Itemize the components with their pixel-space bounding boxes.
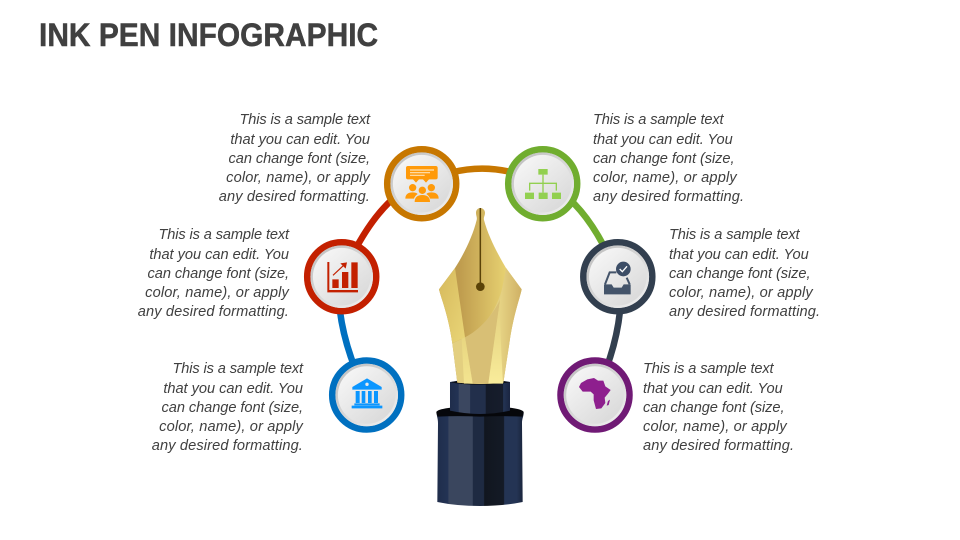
text block: top left: This is a sample text xyxy=(240,112,370,128)
text block: middle right: that you can edit. You xyxy=(669,247,809,263)
icon: rising bar chart xyxy=(327,262,358,292)
text block: bottom left: can change font (size, xyxy=(162,400,303,416)
ring xyxy=(583,242,652,311)
pen nib xyxy=(439,208,522,384)
text block: middle left xyxy=(138,227,290,320)
connector: blue xyxy=(339,277,367,395)
nib body xyxy=(439,208,522,384)
disc xyxy=(564,364,626,426)
node: navy xyxy=(583,242,652,311)
disc xyxy=(335,364,398,426)
text block: top left: can change font (size, xyxy=(229,151,370,167)
text block: bottom right: This is a sample text xyxy=(643,361,774,377)
text block: bottom right: any desired formatting. xyxy=(643,438,794,454)
icon: organisation chart xyxy=(525,169,561,199)
text block: bottom right: that you can edit. You xyxy=(643,381,783,397)
text block: bottom right xyxy=(643,361,794,454)
connector: green xyxy=(562,193,618,277)
text block: middle right: can change font (size, xyxy=(669,266,810,282)
node: purple xyxy=(560,360,630,430)
pen barrel xyxy=(436,379,524,506)
collar inner rim xyxy=(451,379,509,385)
text block: bottom right: can change font (size, xyxy=(643,400,784,416)
icon: classical bank building xyxy=(352,378,382,408)
lower barrel xyxy=(437,413,524,506)
text block: top right: any desired formatting. xyxy=(593,189,744,205)
text block: top left: any desired formatting. xyxy=(219,189,370,205)
icon: inbox with check xyxy=(604,262,631,294)
text block: bottom left xyxy=(152,361,304,454)
text block: middle left: can change font (size, xyxy=(148,266,289,282)
text block: top right: that you can edit. You xyxy=(593,132,733,148)
barrel rim xyxy=(436,406,524,417)
node: orange xyxy=(387,149,456,218)
connector: orange xyxy=(422,169,543,184)
nib lower light area xyxy=(452,268,522,384)
text block: top left: that you can edit. You xyxy=(230,132,370,148)
nib left facet xyxy=(439,268,465,343)
text block: top left xyxy=(219,112,370,205)
connector: red xyxy=(342,193,400,277)
text block: top right: color, name), or apply xyxy=(593,170,737,186)
disc xyxy=(390,152,453,215)
disc xyxy=(511,152,574,215)
text block: middle left: any desired formatting. xyxy=(138,304,289,320)
text block: middle left: that you can edit. You xyxy=(149,247,289,263)
text block: middle left: color, name), or apply xyxy=(145,285,289,301)
text block: top right: can change font (size, xyxy=(593,151,734,167)
nib centre panel xyxy=(465,300,500,384)
text block: bottom left: that you can edit. You xyxy=(163,381,303,397)
text block: middle right: color, name), or apply xyxy=(669,285,813,301)
ring xyxy=(387,149,456,218)
ring xyxy=(307,242,376,311)
text block: middle right xyxy=(669,227,820,320)
icon: people with speech bubble xyxy=(405,166,439,202)
text block: middle left: This is a sample text xyxy=(158,227,289,243)
node: green xyxy=(508,149,577,218)
nib right facet xyxy=(500,268,522,383)
connector: navy xyxy=(595,277,621,395)
text block: bottom left: any desired formatting. xyxy=(152,438,303,454)
node: blue xyxy=(332,360,401,430)
ring xyxy=(508,149,577,218)
text block: bottom right: color, name), or apply xyxy=(643,419,787,435)
nib bright streaks xyxy=(462,337,473,384)
nib breather hole xyxy=(476,282,485,291)
icon: map of Africa xyxy=(579,378,611,409)
title: INK PEN INFOGRAPHIC xyxy=(39,17,378,53)
text block: bottom left: color, name), or apply xyxy=(159,419,303,435)
collar xyxy=(450,379,510,414)
text block: top left: color, name), or apply xyxy=(226,170,370,186)
ring xyxy=(560,360,630,430)
text block: top right xyxy=(593,112,744,205)
text block: middle right: This is a sample text xyxy=(669,227,800,243)
node: red xyxy=(307,242,376,311)
nib slit xyxy=(478,208,483,287)
ring xyxy=(332,360,401,430)
text block: middle right: any desired formatting. xyxy=(669,304,820,320)
text block: top right: This is a sample text xyxy=(593,112,724,128)
disc xyxy=(586,245,649,308)
disc xyxy=(310,245,373,308)
text block: bottom left: This is a sample text xyxy=(172,361,303,377)
